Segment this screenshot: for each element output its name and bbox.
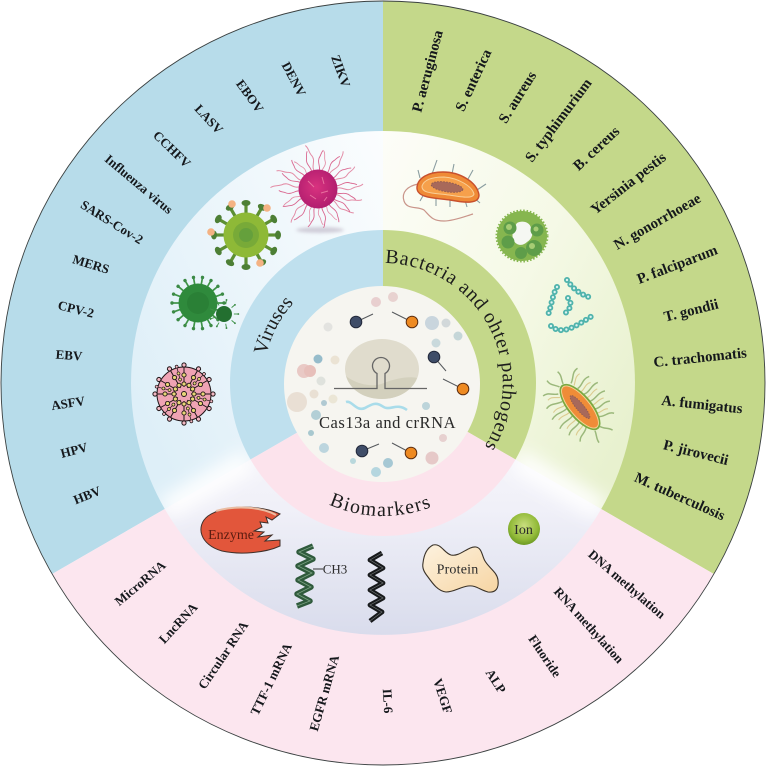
crRNA stem loop xyxy=(334,358,427,388)
icon: methylated DNA: CH3 xyxy=(323,562,347,576)
icon: green pollen-like cell xyxy=(497,211,547,261)
virus labels xyxy=(50,53,354,507)
icon: enzyme: Enzyme xyxy=(208,528,254,543)
icon: enzyme xyxy=(201,507,280,553)
heading: Viruses: Viruses xyxy=(254,298,292,352)
bacteria and pathogen labels: S. enterica xyxy=(453,46,496,114)
virus labels: Influenza virus xyxy=(102,151,176,217)
icon: protein: Protein xyxy=(437,562,478,578)
bacteria and pathogen labels: M. tuberculosis xyxy=(632,470,728,524)
heading: Bacteria and ohter pathogens: Bacteria and ohter pathogens xyxy=(386,250,516,450)
bacteria and pathogen labels: P. jirovecii xyxy=(661,437,730,469)
virus labels: HPV xyxy=(59,439,90,461)
bacteria and pathogen labels: N. gonorrhoeae xyxy=(611,190,704,253)
inner ring: biomarkers xyxy=(250,383,516,536)
icon: teal bacterial chains xyxy=(548,280,592,330)
inner ring: pathogens xyxy=(383,230,536,460)
icon: orange bacterium with green hairs xyxy=(531,356,628,456)
bacteria and pathogen labels: S. typhimurium xyxy=(522,75,596,166)
middle ring: biomarkers xyxy=(165,383,601,635)
virus labels: DENV xyxy=(279,59,310,99)
panel: biomarkers outer sector xyxy=(52,383,714,765)
heading: Biomarkers xyxy=(329,492,430,516)
icon: green virus with orange tips xyxy=(207,200,281,270)
biomarker labels: IL-6 xyxy=(380,688,396,714)
target RNA wave xyxy=(346,402,407,410)
virus labels: ASFV xyxy=(50,393,87,413)
virus labels: ZIKV xyxy=(328,53,354,90)
biomarker labels: Fluoride xyxy=(525,632,565,680)
panel: viruses outer sector xyxy=(1,1,383,574)
heading: Biomarkers: Biomarkers xyxy=(329,492,430,516)
bacteria and pathogen labels xyxy=(410,28,748,524)
background bubbles xyxy=(287,292,462,477)
virus labels: CPV-2 xyxy=(56,297,96,321)
bacteria and pathogen labels: P. aeruginosa xyxy=(410,28,447,114)
central disk: Cas13a and crRNA xyxy=(284,286,480,482)
biomarker labels: LncRNA xyxy=(156,599,201,646)
icon: DNA strand xyxy=(370,553,383,621)
bacteria and pathogen labels: T. gondii xyxy=(662,297,720,326)
virus labels: EBOV xyxy=(233,77,267,116)
icon: ion xyxy=(508,513,540,545)
bacteria and pathogen labels: Yersinia pestis xyxy=(588,150,670,218)
bacteria and pathogen labels: S. aureus xyxy=(496,69,540,127)
middle ring: viruses xyxy=(131,131,383,509)
virus labels: SARS-Cov-2 xyxy=(78,197,146,247)
virus labels: EBV xyxy=(55,347,83,364)
icon: methylated DNA xyxy=(297,546,347,606)
label: Cas13a and crRNA: Cas13a and crRNA xyxy=(319,413,456,432)
virus labels: MERS xyxy=(71,251,111,277)
biomarker labels: ALP xyxy=(483,666,509,696)
icon: protein xyxy=(423,545,498,592)
bacteria and pathogen labels: P. falciparum xyxy=(635,242,721,288)
biomarker labels: VEGF xyxy=(430,677,456,716)
biomarker labels: TTF-1 mRNA xyxy=(247,640,295,718)
virus labels: LASV xyxy=(192,101,227,137)
biomarker labels: RNA methylation xyxy=(551,584,628,667)
biomarker labels xyxy=(112,547,669,733)
virus labels: HBV xyxy=(71,483,103,507)
reporter probes xyxy=(350,312,469,459)
biomarker labels: DNA methylation xyxy=(585,547,669,622)
biomarker labels: EGFR mRNA xyxy=(306,653,342,733)
bacteria and pathogen labels: B. cereus xyxy=(570,123,623,174)
biomarker labels: MicroRNA xyxy=(112,557,169,609)
heading: Viruses xyxy=(254,298,292,352)
icon: dark green virus with bud xyxy=(170,275,239,331)
icon: orange flagellated bacterium xyxy=(403,160,486,221)
middle ring: pathogens xyxy=(383,131,635,509)
icon: pink tentacled virus xyxy=(270,145,363,233)
bacteria and pathogen labels: C. trachomatis xyxy=(653,345,748,371)
inner ring: viruses xyxy=(230,230,383,460)
biomarker labels: Circular RNA xyxy=(195,618,252,692)
icon: ion: Ion xyxy=(514,523,533,538)
bacteria and pathogen labels: A. fumigatus xyxy=(661,393,743,417)
panel: bacteria and other pathogens outer sector xyxy=(383,1,765,574)
virus labels: CCHFV xyxy=(150,128,194,171)
Cas13a protein blob xyxy=(345,339,419,399)
icon: pink virus with yellow nodes xyxy=(153,363,215,425)
